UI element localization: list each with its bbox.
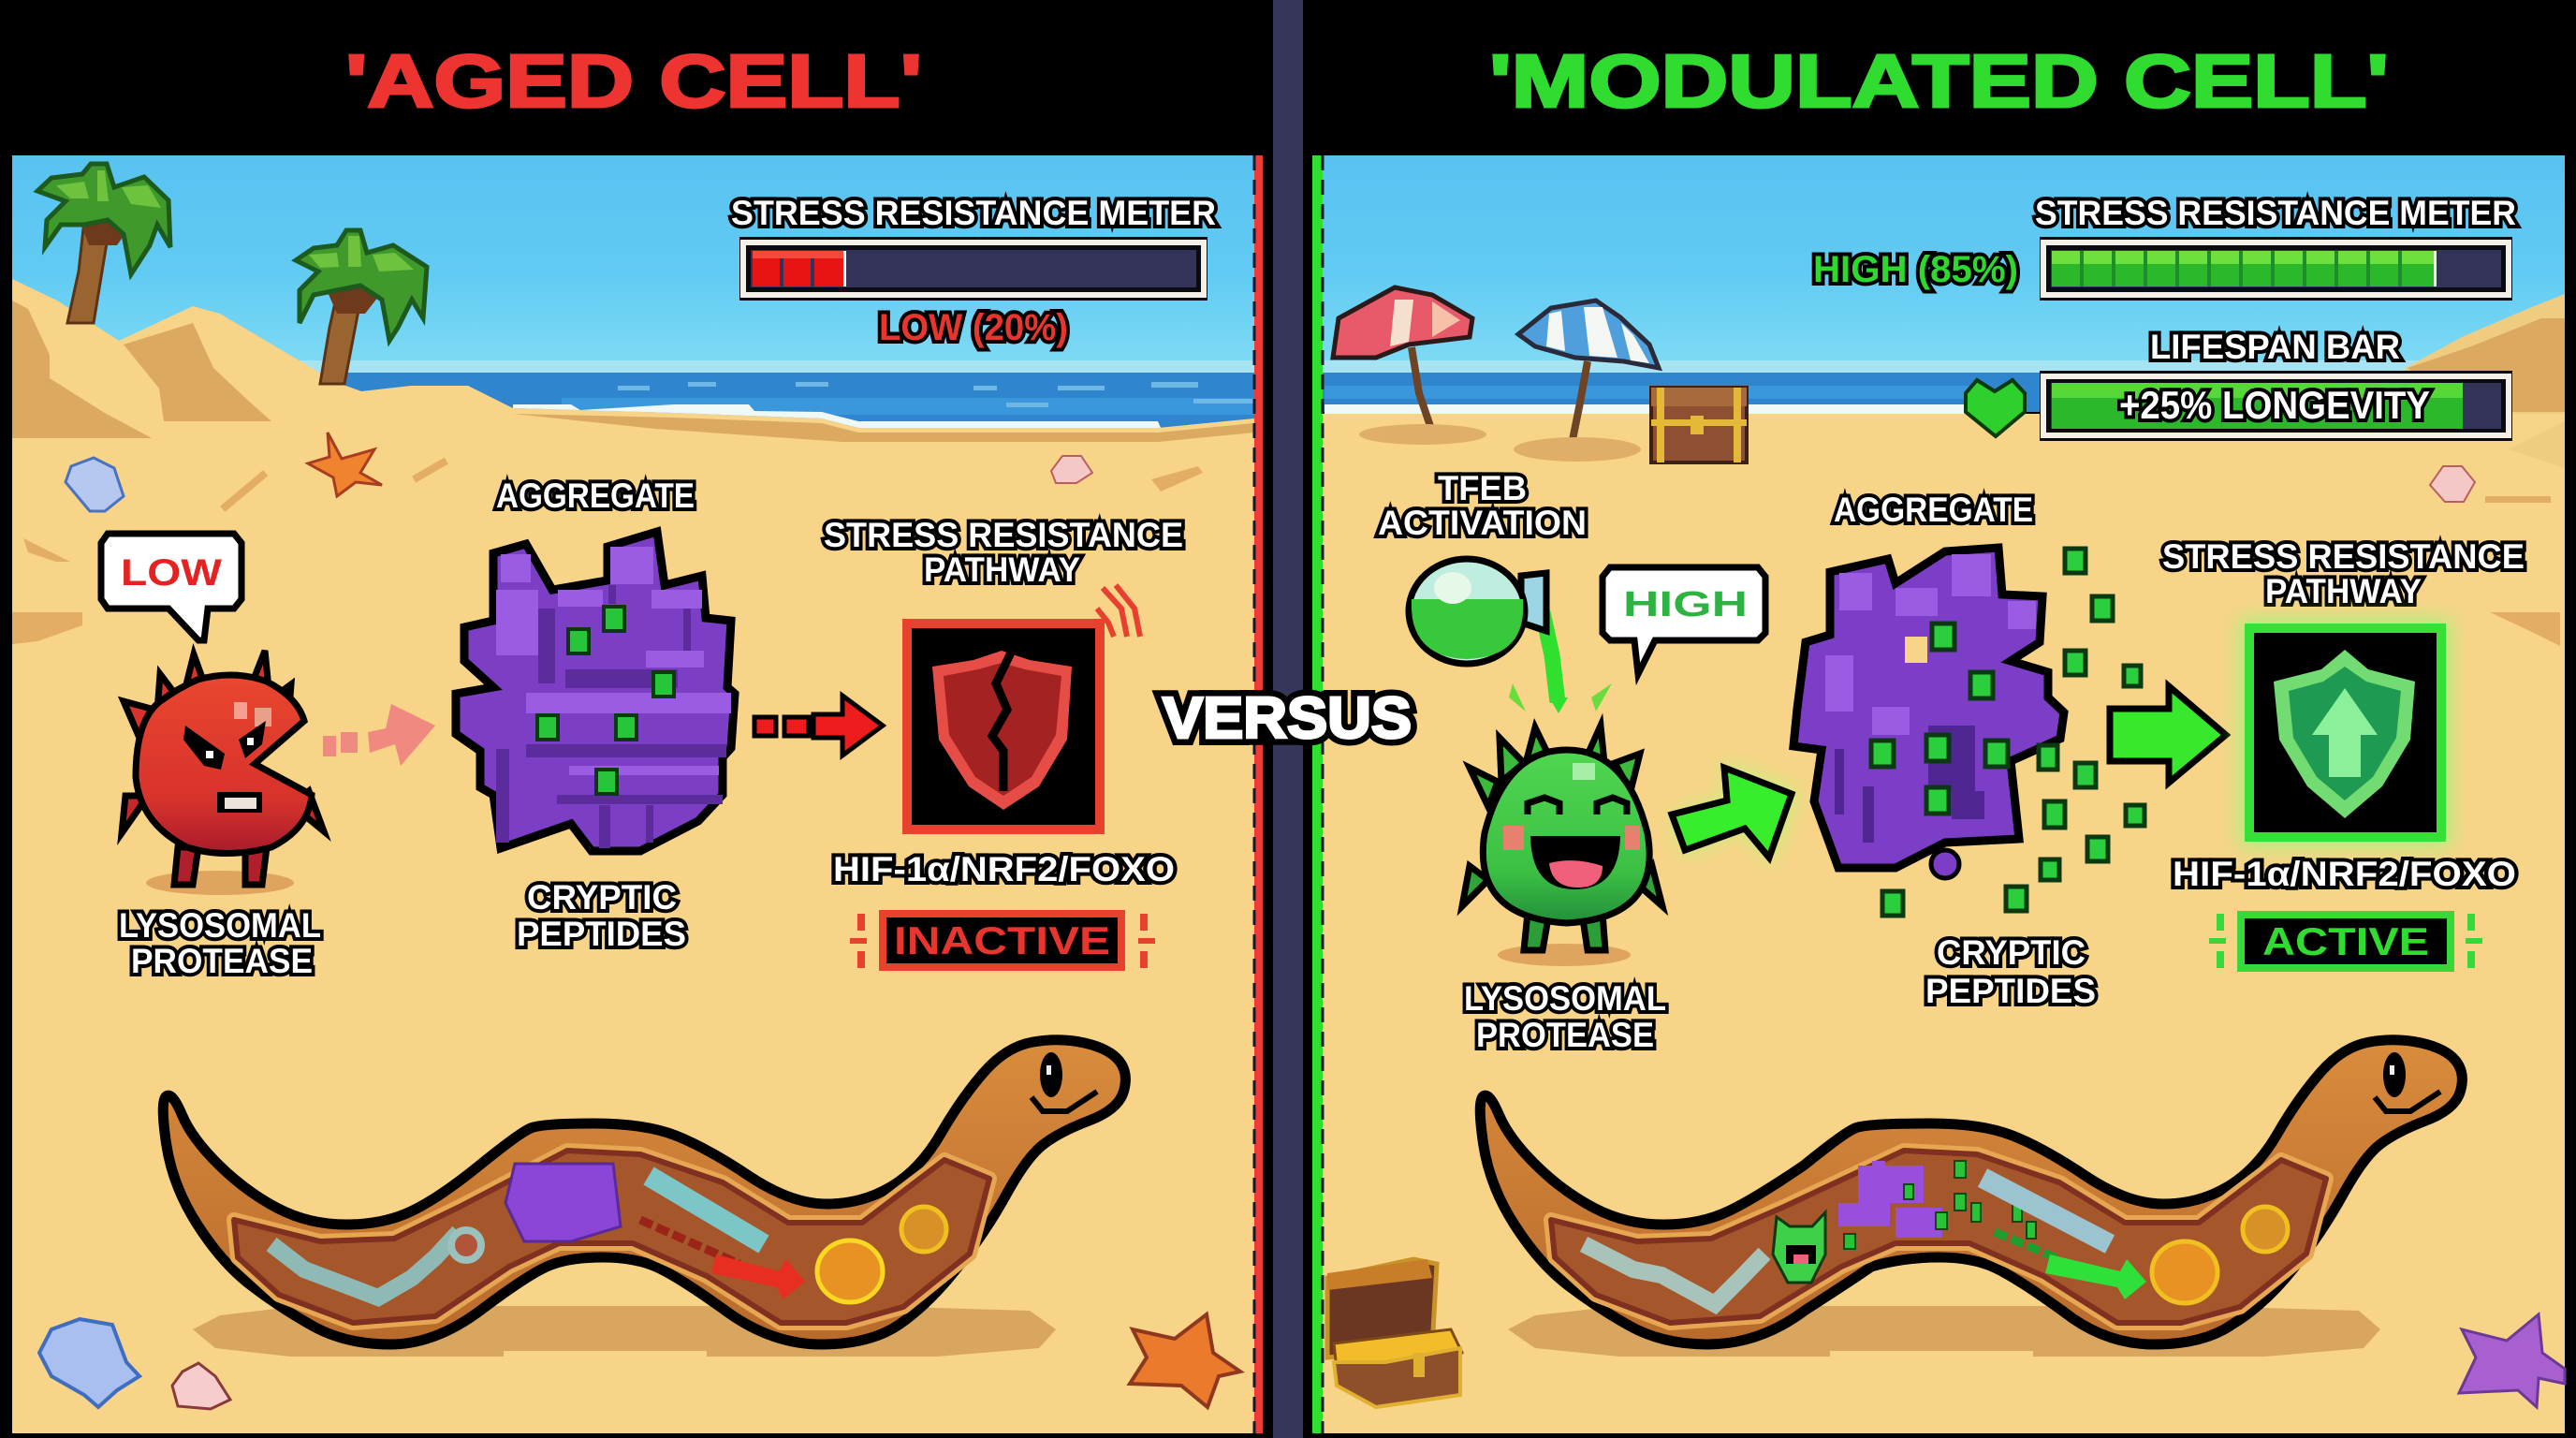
shell: pink (2430, 466, 2475, 502)
panel: modulated cell (1312, 155, 2565, 1433)
sand smudges (12, 458, 1203, 644)
liquid stream (1543, 612, 1558, 702)
badge: versus: VERSUS (1163, 686, 1412, 751)
label: cryptic peptides: PEPTIDES (1925, 972, 2096, 1010)
label: lysosomal protease: LYSOSOMAL (1464, 979, 1666, 1018)
worm eye (1040, 1052, 1062, 1097)
orange organ (2152, 1241, 2217, 1303)
shore foam (1325, 404, 2008, 414)
sand (12, 279, 1254, 1433)
flask neck (1521, 573, 1546, 631)
aggregate: breaking apart (1793, 548, 2144, 916)
starfish (308, 433, 382, 496)
shell: blue (39, 1319, 139, 1407)
worm gut (1551, 1151, 2326, 1323)
label: cryptic peptides (1925, 933, 2096, 1010)
purple aggregate in gut (505, 1164, 621, 1241)
lifespan label: LIFESPAN BAR (2150, 328, 2400, 366)
sky (1312, 155, 2565, 373)
palm tree (296, 230, 427, 384)
spikes (185, 654, 206, 688)
icon: green heart (1966, 380, 2025, 436)
blue tube (649, 1176, 764, 1244)
shadow (1498, 944, 1631, 966)
shoreline foam (513, 404, 1161, 428)
meter value: HIGH (85%) (1813, 249, 2018, 290)
body (1483, 750, 1649, 923)
speech bubble: high (1603, 567, 1765, 674)
label: lysosomal protease (1464, 979, 1666, 1054)
worm eye (2383, 1052, 2406, 1097)
umbrella shadow (1514, 437, 1641, 462)
flask bulb (1409, 559, 1525, 664)
intestine squiggle (1584, 1244, 1764, 1304)
broken debris (1931, 850, 1959, 878)
dune (2396, 294, 2565, 468)
status: active: ACTIVE (2262, 919, 2429, 963)
panel: aged cell (12, 155, 1263, 1433)
center divider (1273, 0, 1303, 1438)
meter value: LOW (20%) (879, 307, 1068, 348)
icon: active shield (2239, 618, 2452, 847)
starfish: purple (2459, 1314, 2565, 1407)
cryptic peptides (537, 607, 674, 794)
meter label: STRESS RESISTANCE METER (731, 194, 1216, 232)
sea (12, 360, 1254, 431)
starfish: orange (1130, 1314, 1240, 1407)
meter fill (2052, 251, 2437, 286)
umbrella: blue (1518, 301, 1659, 445)
arrow: active green (1670, 760, 1799, 866)
angry eyes (183, 726, 225, 770)
arrow: green to pathway (2110, 686, 2226, 783)
status: active (2209, 914, 2482, 968)
stress resistance meter (731, 194, 1216, 348)
label: lysosomal protease: PROTEASE (1476, 1016, 1654, 1054)
green specks (1844, 1161, 2036, 1249)
arrow: weak dashed (323, 704, 435, 766)
bar fill (2052, 383, 2463, 429)
worm smile (2375, 1092, 2440, 1111)
sea (1312, 360, 2565, 412)
label: lysosomal protease: LYSOSOMAL (119, 906, 321, 945)
lysosomal protease: red angry (122, 651, 324, 895)
cheeks (1503, 826, 1524, 850)
worm: C. elegans aged (163, 1040, 1125, 1344)
worm shadow (1508, 1306, 2380, 1357)
red arrow (640, 1220, 805, 1299)
meter label: STRESS RESISTANCE METER (2035, 194, 2516, 232)
sand smudges (2485, 496, 2560, 646)
shell (66, 458, 124, 511)
arrow: blocked dashed red (754, 696, 883, 756)
purple fragments in gut (1838, 1161, 1942, 1238)
label: aggregate: AGGREGATE (496, 477, 695, 515)
label: stress resistance pathway (2162, 537, 2525, 610)
label: stress resistance pathway: PATHWAY (924, 550, 1080, 589)
label: stress resistance pathway: STRESS RESISTANCE (824, 516, 1183, 554)
orange organ (817, 1240, 883, 1302)
badge: versus: VERSUS (1163, 686, 1412, 751)
label: pathway genes: HIF-1α/NRF2/FOXO (833, 850, 1175, 888)
title: aged cell: 'AGED CELL' (345, 39, 922, 123)
meter fill (753, 251, 846, 286)
label: cryptic peptides: CRYPTIC (527, 878, 677, 917)
label: tfeb activation: ACTIVATION (1378, 504, 1587, 542)
lifespan bar (1966, 328, 2512, 441)
sky (12, 155, 1254, 373)
label: stress resistance pathway: PATHWAY (2265, 572, 2422, 610)
spikes (1526, 727, 1550, 763)
signal squiggles (1097, 585, 1140, 637)
label: cryptic peptides: PEPTIDES (517, 915, 686, 953)
shell (1051, 456, 1092, 483)
gold organ (2243, 1207, 2288, 1252)
intestine squiggle (271, 1232, 459, 1298)
aggregate: purple block cluster (456, 532, 735, 851)
happy eyes (1528, 798, 1559, 814)
treasure chest (1651, 388, 1747, 462)
icon: broken shield (907, 624, 1100, 829)
speech bubble: low: LOW (121, 552, 222, 594)
palm tree (37, 164, 170, 323)
worm shadow (193, 1306, 1056, 1357)
title: modulated cell: 'MODULATED CELL' (1489, 39, 2389, 123)
bar track (2040, 371, 2512, 441)
frown mouth (217, 792, 262, 813)
label: lysosomal protease (119, 906, 321, 980)
shadow (146, 871, 294, 895)
gold organ (901, 1207, 946, 1252)
worm gut (234, 1151, 989, 1323)
label: tfeb activation (1378, 469, 1587, 542)
meter bar (2040, 237, 2512, 301)
umbrella: red (1333, 287, 1472, 432)
label: tfeb activation: TFEB (1438, 469, 1527, 507)
status: inactive (850, 914, 1155, 968)
meter bar (739, 237, 1208, 301)
treasure chest: open (1327, 1259, 1462, 1407)
laughing mouth (1530, 836, 1620, 889)
legs (174, 847, 198, 885)
label: aggregate: AGGREGATE (1834, 491, 2033, 529)
legs (1524, 913, 1549, 950)
label: lysosomal protease: PROTEASE (131, 942, 313, 980)
green edge line (1312, 155, 1323, 1433)
label: cryptic peptides (517, 878, 686, 953)
label: stress resistance pathway: STRESS RESISTANCE (2162, 537, 2525, 576)
lysosomal protease: green happy (1462, 726, 1662, 966)
cryptic peptides released (1871, 549, 2144, 916)
speech bubble: high: HIGH (1623, 585, 1748, 624)
mini green protease (1773, 1212, 1825, 1283)
green arrow (1995, 1232, 2146, 1299)
stress resistance meter (1813, 194, 2516, 301)
dune shadows (12, 301, 1254, 442)
dune shadow (2408, 318, 2565, 412)
label: pathway genes: HIF-1α/NRF2/FOXO (2173, 855, 2516, 893)
speech bubble: low (101, 534, 242, 640)
body (136, 675, 312, 854)
blue tube (1983, 1178, 2110, 1244)
status: inactive: INACTIVE (894, 918, 1110, 962)
label: stress resistance pathway (824, 516, 1183, 589)
icon: green flask pouring (1409, 559, 1612, 713)
red edge line (1254, 155, 1263, 1433)
shell: pink (172, 1363, 230, 1409)
bar value: +25% LONGEVITY (2119, 383, 2430, 427)
sand (1312, 414, 2565, 1433)
worm: C. elegans modulated (1480, 1040, 2462, 1344)
label: cryptic peptides: CRYPTIC (1937, 933, 2086, 972)
gap in aggregate (1905, 637, 1927, 663)
umbrella shadow (1359, 424, 1486, 445)
worm smile (1032, 1092, 1097, 1111)
